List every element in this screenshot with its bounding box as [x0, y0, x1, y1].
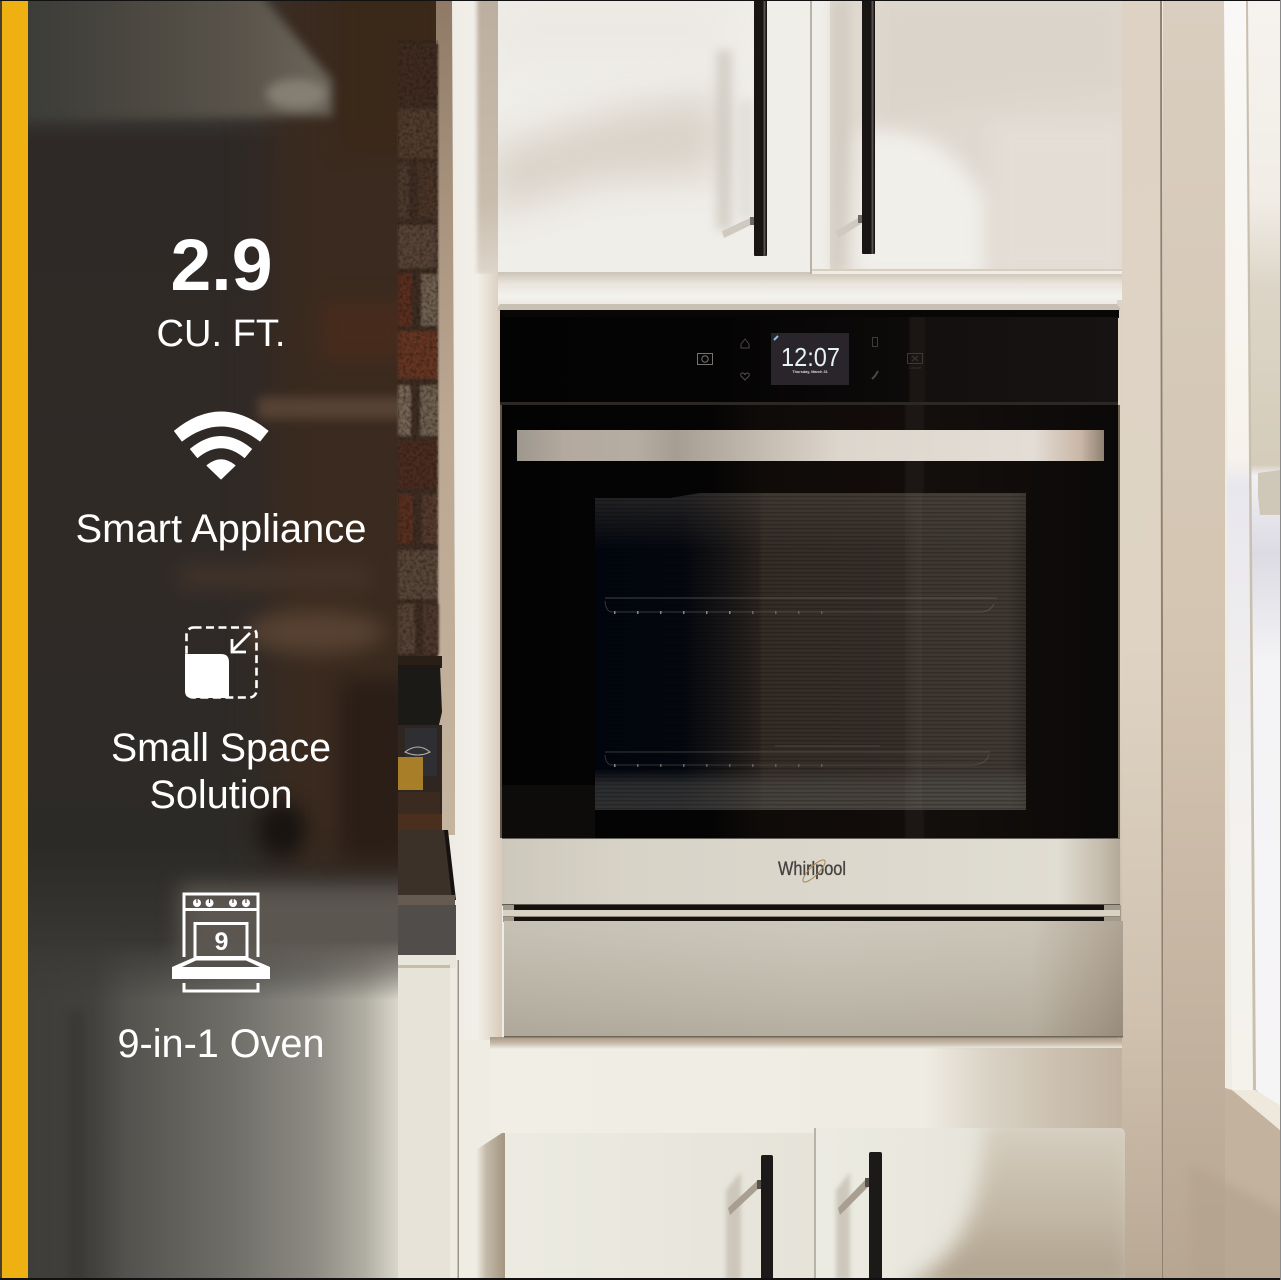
lower cabinet left door: [679, 1133, 814, 1278]
window frame and glass: [1190, 0, 1281, 1280]
upper oven rack: [605, 598, 997, 612]
oven door handle: [517, 430, 1104, 461]
countertop: [398, 830, 459, 1280]
icon: oven: [172, 894, 270, 991]
wall oven: [498, 304, 1123, 1038]
control panel: [500, 317, 1118, 405]
heart icon: [741, 373, 749, 380]
oven door: [502, 405, 1120, 838]
label: Smart Appliance: [76, 507, 366, 551]
cancel label: Cancel: [909, 365, 921, 370]
feature: capacity: CU. FT.: [156, 313, 286, 355]
handle left: [750, 0, 767, 256]
frosted panel: [28, 1, 436, 1278]
remote icon: [872, 371, 878, 379]
upper cabinet handles: [750, 0, 875, 256]
lower cabinet handles: [757, 1152, 882, 1280]
upper cabinet right door: [830, 1, 1122, 269]
drawer gap and trim: [503, 905, 1121, 922]
upper cabinet left door: [498, 1, 753, 272]
oven top trim: [498, 304, 1120, 311]
spice grinder: [398, 656, 442, 830]
power button: [698, 354, 712, 364]
room background: [448, 1, 1280, 1278]
feature: small space solution: Solution: [150, 773, 292, 817]
handle shadow: [840, 218, 861, 236]
brick wall: [398, 44, 439, 665]
feature: smart appliance: [76, 412, 366, 551]
icon: oven: 9: [215, 928, 228, 956]
handle shadow: [722, 218, 753, 238]
lower oven rack: [605, 746, 990, 765]
clock display: 12:07: [781, 342, 840, 372]
left border: [0, 0, 2, 1280]
icon: wifi: [174, 412, 268, 479]
feature: capacity: 2.9: [170, 225, 272, 306]
window latch: [1258, 470, 1281, 515]
yellow accent stripe: [2, 0, 28, 1280]
icon: resize: [185, 628, 256, 698]
warming drawer: [504, 921, 1123, 1038]
oven window: [595, 493, 1026, 810]
feature: capacity: [156, 225, 286, 355]
feature: 9-in-1 oven: [118, 894, 324, 1066]
wall strip beside brick: [436, 0, 455, 835]
feature: small space solution: [111, 628, 331, 817]
label: Small Space: [111, 726, 331, 770]
stainless control base: [502, 838, 1120, 906]
handle right: [858, 0, 875, 254]
phone icon: [872, 338, 878, 346]
clock display: [771, 333, 849, 385]
whirlpool logo: [778, 857, 846, 885]
handle shadow: [726, 1172, 741, 1280]
home icon: [741, 339, 749, 348]
clock display: Thursday, March 31: [792, 370, 828, 374]
cancel button: [908, 354, 922, 364]
label: 9-in-1 Oven: [118, 1022, 324, 1066]
whirlpool logo: Whirlpool: [778, 859, 846, 880]
lower cabinet right door: [834, 1128, 1125, 1278]
